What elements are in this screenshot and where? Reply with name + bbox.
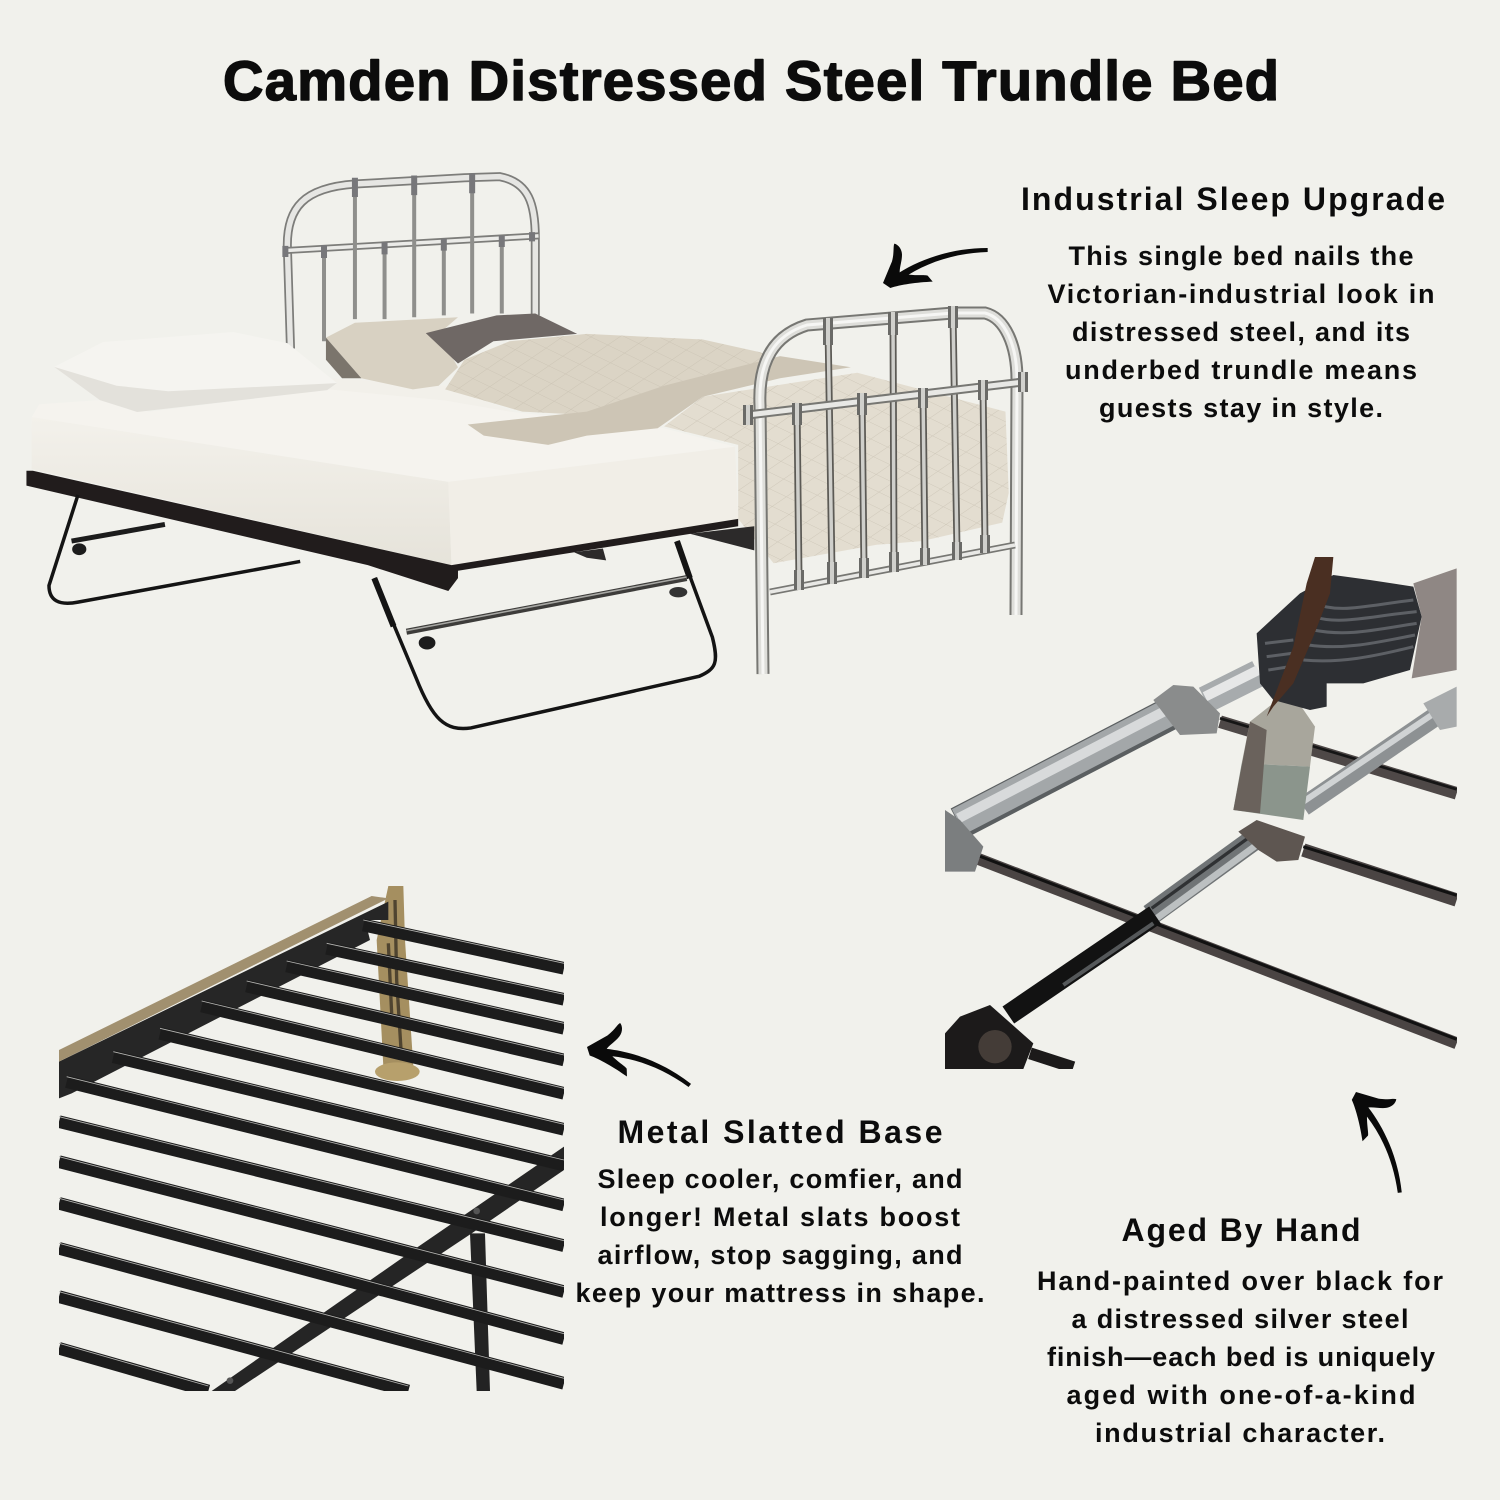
photo: metal slatted base: [59, 886, 564, 1391]
front folding leg: [374, 541, 716, 729]
left folding leg: [49, 495, 300, 603]
photo: hand painting steel pipes: [945, 557, 1457, 1069]
sleeve: [1412, 568, 1457, 678]
text block: Aged By Hand: Hand-painted over black for: [1037, 1266, 1443, 1296]
folded duvet: [445, 334, 780, 419]
text block: Metal Slatted Base: longer! Metal slats boost: [600, 1202, 960, 1232]
glove: [1257, 557, 1422, 717]
heading: Metal Slatted Base: Metal Slatted Base: [618, 1114, 942, 1150]
text block: Industrial Sleep Upgrade: distressed steel, and its: [1072, 317, 1410, 347]
text block: Aged By Hand: finish—each bed is uniquely: [1047, 1342, 1435, 1372]
paint brush: [1233, 690, 1315, 820]
text block: Industrial Sleep Upgrade: This single bed nails the: [1068, 241, 1414, 271]
heading: Industrial Sleep Upgrade: Industrial Sleep Upgrade: [1021, 181, 1445, 217]
footboard: [748, 306, 1023, 674]
cross bar: [212, 1147, 564, 1391]
text block: Aged By Hand: a distressed silver steel: [1072, 1304, 1408, 1334]
slat highlights: [59, 920, 564, 1386]
pipe fittings: [945, 685, 1457, 1069]
grey pillow: [426, 314, 577, 364]
leg post: [375, 886, 420, 1081]
title: Camden Distressed Steel Trundle Bed: [223, 49, 1279, 112]
back frame: [574, 526, 754, 560]
text block: Aged By Hand: aged with one-of-a-kind: [1066, 1380, 1416, 1410]
trundle frame: [26, 471, 738, 591]
slats: [59, 925, 564, 1391]
steel tubes: [958, 670, 1440, 1015]
headboard: [284, 173, 539, 349]
far side bedding: [664, 373, 1009, 563]
text block: Industrial Sleep Upgrade: [1048, 241, 1434, 423]
arrow: to bed: [883, 244, 988, 288]
text block: Industrial Sleep Upgrade: Victorian-industrial look in: [1048, 279, 1434, 309]
text block: Metal Slatted Base: [576, 1164, 984, 1308]
thin rods: [977, 718, 1457, 1043]
product image: trundle bed: [26, 173, 1023, 729]
arrow: to slatted base: [584, 1016, 694, 1115]
white pillow: [54, 332, 337, 412]
text block: Metal Slatted Base: airflow, stop sagging, and: [598, 1240, 962, 1270]
text block: Industrial Sleep Upgrade: guests stay in style.: [1099, 393, 1383, 423]
heading: Aged By Hand: Aged By Hand: [1122, 1212, 1360, 1248]
text block: Aged By Hand: [1037, 1266, 1443, 1448]
mattress: [32, 389, 738, 565]
text block: Metal Slatted Base: keep your mattress in shape.: [576, 1278, 984, 1308]
arrow: to hand-painted photo: [1351, 1088, 1406, 1197]
text block: Industrial Sleep Upgrade: underbed trundle means: [1065, 355, 1417, 385]
sheet: [329, 378, 522, 419]
text block: Aged By Hand: industrial character.: [1095, 1418, 1385, 1448]
throw blanket: [468, 356, 851, 445]
side rail: [59, 896, 388, 1098]
tan pillow: [326, 317, 458, 389]
text block: Metal Slatted Base: Sleep cooler, comfier, and: [598, 1164, 962, 1194]
